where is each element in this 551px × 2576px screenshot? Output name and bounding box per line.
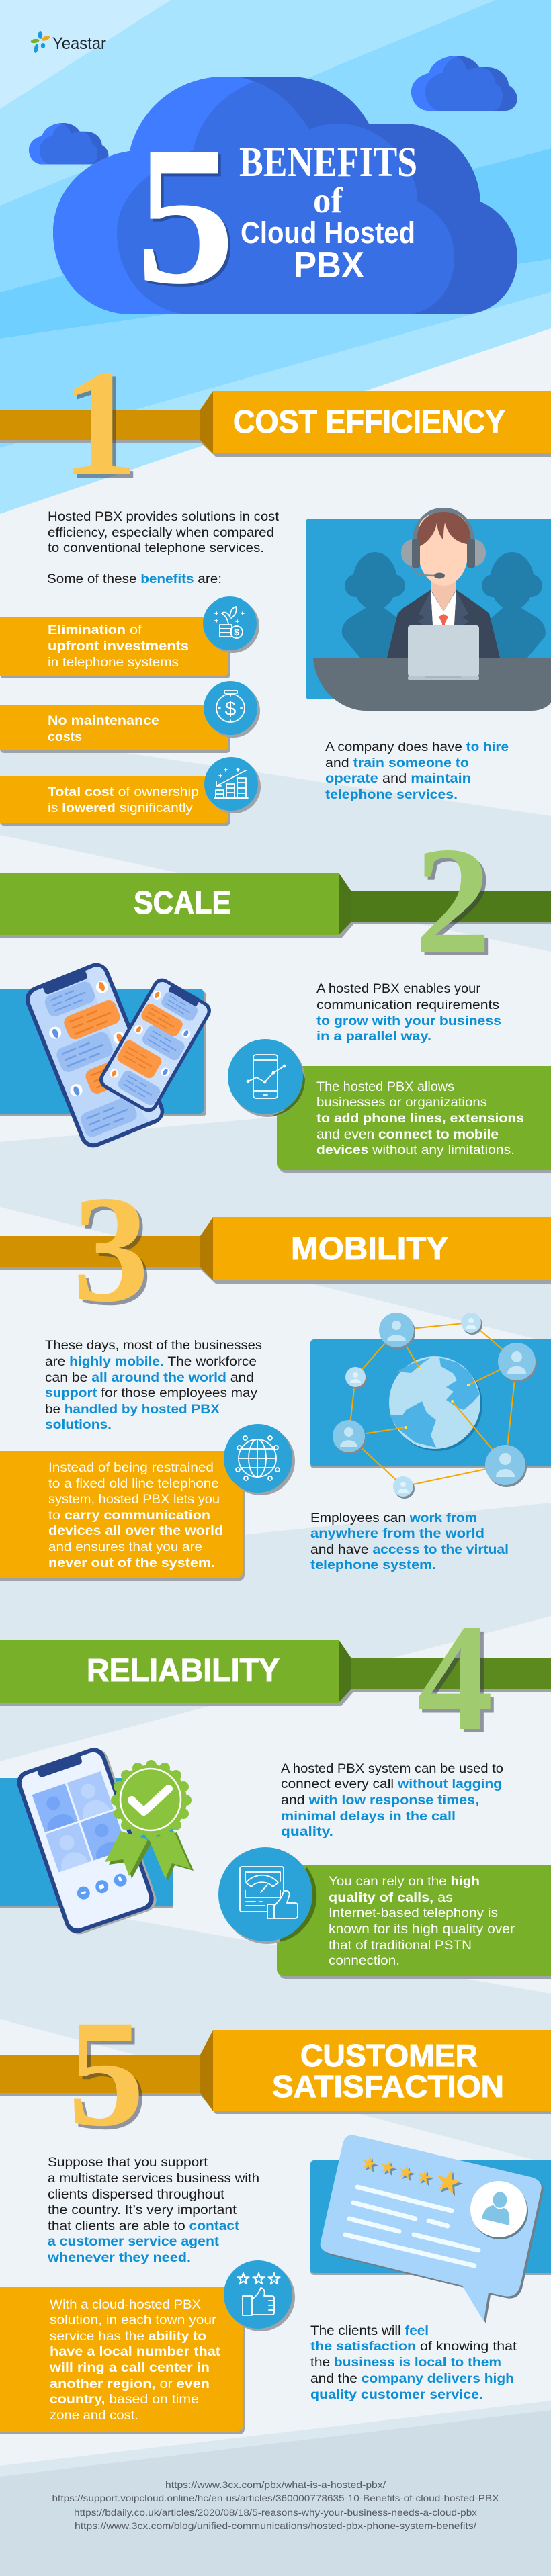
panel: add phone lines: and even connect to mobile bbox=[316, 1128, 499, 1142]
text: mobility intro: can be all around the world and bbox=[45, 1371, 254, 1385]
icon: networked globe bbox=[224, 1424, 295, 1495]
panel: high quality of calls: connection. bbox=[329, 1954, 400, 1968]
icon: stopwatch dollar: $ bbox=[225, 698, 237, 720]
text: scale intro: A hosted PBX enables your bbox=[316, 982, 481, 996]
user nodes bbox=[333, 1313, 537, 1499]
panel: local number: have a local number that bbox=[50, 2345, 221, 2359]
silhouette left bbox=[342, 552, 407, 658]
panel: blue backdrop satisfaction bbox=[310, 2160, 551, 2275]
text: source links bbox=[52, 2479, 499, 2531]
panel: add phone lines: to add phone lines, extensions bbox=[316, 1112, 524, 1126]
ribbon: cost efficiency bbox=[0, 391, 551, 457]
panel: elimination of upfront investments: Elimination of bbox=[48, 623, 142, 637]
title: Cloud Hosted bbox=[241, 216, 415, 250]
text: source links: https://bdaily.co.uk/articles/2020/08/18/5-reasons-why-your-business-needs-a-cloud-pbx bbox=[74, 2507, 477, 2518]
ribbon: mobility: MOBILITY bbox=[291, 1231, 448, 1267]
panel: elimination of upfront investments bbox=[0, 617, 230, 678]
globe bbox=[389, 1356, 482, 1451]
text: reliability intro bbox=[281, 1762, 503, 1839]
panel: total cost of ownership: is lowered significantly bbox=[48, 801, 194, 815]
panel: local number bbox=[0, 2287, 245, 2434]
text: hire and train: A company does have to hire bbox=[325, 740, 509, 754]
panel: carry communication devices: to a fixed old line telephone bbox=[48, 1477, 219, 1491]
panel: total cost of ownership: Total cost of ownership bbox=[48, 785, 199, 799]
text: hire and train: operate and maintain bbox=[325, 772, 471, 786]
text: customer satisfaction intro: that clients are able to contact bbox=[48, 2219, 240, 2233]
title: of bbox=[313, 181, 343, 220]
text: customer satisfaction intro bbox=[47, 2156, 259, 2265]
illustration: call center agent bbox=[306, 508, 551, 711]
text: hire and train bbox=[325, 740, 509, 802]
text: scale intro: communication requirements bbox=[316, 998, 499, 1012]
text: customer satisfaction intro: a customer service agent bbox=[48, 2235, 220, 2249]
text: cost efficiency intro: Hosted PBX provides solutions in cost bbox=[48, 510, 280, 524]
panel: high quality of calls bbox=[277, 1865, 551, 1979]
panel: carry communication devices: system, hosted PBX lets you bbox=[48, 1493, 220, 1507]
text: work from anywhere: telephone system. bbox=[310, 1558, 436, 1572]
panel: carry communication devices: never out of the system. bbox=[48, 1556, 215, 1570]
ribbon: customer satisfaction: SATISFACTION bbox=[272, 2069, 504, 2104]
ribbon: scale bbox=[0, 873, 551, 938]
panel: high quality of calls: quality of calls, as bbox=[329, 1891, 453, 1905]
illustration: global network bbox=[310, 1313, 551, 1499]
panel: no maintenance costs: No maintenance bbox=[48, 714, 159, 728]
desk bbox=[313, 658, 551, 711]
panel: blue backdrop reliability bbox=[0, 1778, 173, 1908]
icon: small cloud left bbox=[29, 123, 109, 164]
text: source links: https://support.voipcloud.online/hc/en-us/articles/360000778635-10-Benefits-of-cloud-hosted-PBX bbox=[52, 2493, 499, 2503]
panel: high quality of calls: that of traditional PSTN bbox=[329, 1939, 472, 1953]
panel: high quality of calls: Internet-based telephony is bbox=[329, 1906, 498, 1920]
icon: stopwatch dollar bbox=[204, 681, 260, 738]
number 5: 5 bbox=[68, 1989, 144, 2158]
icon: phone with growth line bbox=[228, 1039, 305, 1117]
illustration: video call phone bbox=[13, 1744, 159, 1938]
panel: local number: country, based on time bbox=[50, 2393, 199, 2407]
text: customer satisfaction intro: the country. It’s very important bbox=[48, 2203, 237, 2217]
panel: local number: zone and cost. bbox=[50, 2409, 138, 2423]
icon: approval badge bbox=[105, 1760, 194, 1881]
logo: Yeastar bbox=[30, 31, 106, 53]
text: hire and train: telephone services. bbox=[325, 788, 458, 802]
text: feel the satisfaction bbox=[310, 2324, 517, 2402]
number 1: 1 bbox=[61, 339, 138, 508]
review lines bbox=[345, 2187, 478, 2266]
panel: blue backdrop scale bbox=[0, 989, 206, 1116]
ribbon: customer satisfaction: CUSTOMER bbox=[300, 2038, 478, 2073]
panel: carry communication devices: to carry communication bbox=[48, 1509, 210, 1523]
ribbon: reliability bbox=[0, 1640, 551, 1706]
text: feel the satisfaction: The clients will feel bbox=[310, 2324, 429, 2338]
text: source links: https://www.3cx.com/pbx/what-is-a-hosted-pbx/ bbox=[165, 2479, 386, 2490]
reviewer avatar bbox=[470, 2181, 528, 2239]
panel: blue backdrop mobility bbox=[310, 1339, 551, 1468]
panel: no maintenance costs: costs bbox=[48, 730, 82, 744]
panel: carry communication devices: Instead of being restrained bbox=[48, 1461, 214, 1475]
ribbon: scale: SCALE bbox=[134, 885, 231, 921]
speech bubble bbox=[321, 2135, 544, 2323]
text: work from anywhere: anywhere from the world bbox=[310, 1527, 484, 1541]
text: feel the satisfaction: the satisfaction of knowing that bbox=[310, 2340, 517, 2354]
text: reliability intro: connect every call without lagging bbox=[281, 1777, 502, 1791]
text: reliability intro: and with low response times, bbox=[281, 1793, 479, 1808]
text: cost efficiency intro: to conventional telephone services. bbox=[48, 541, 264, 556]
text: reliability intro: quality. bbox=[281, 1825, 333, 1839]
panel: no maintenance costs bbox=[0, 705, 230, 753]
title cloud bbox=[53, 77, 517, 314]
panel: add phone lines bbox=[277, 1066, 551, 1173]
laptop bbox=[408, 625, 479, 680]
panel: blue backdrop bbox=[306, 519, 551, 699]
panel: local number: service has the ability to bbox=[50, 2329, 206, 2344]
illustration: review speech bubble bbox=[310, 2135, 551, 2323]
text: mobility intro: solutions. bbox=[45, 1418, 112, 1432]
text: work from anywhere: and have access to the virtual bbox=[310, 1543, 509, 1557]
background: footer band bbox=[0, 2410, 551, 2576]
rating stars bbox=[361, 2155, 465, 2197]
network links bbox=[349, 1323, 517, 1486]
panel: carry communication devices: devices all over the world bbox=[48, 1524, 223, 1538]
number 3: 3 bbox=[73, 1165, 149, 1334]
illustration: small chat phone bbox=[96, 975, 214, 1116]
text: customer satisfaction intro: whenever they need. bbox=[47, 2251, 191, 2265]
text: reliability intro: minimal delays in the call bbox=[281, 1810, 456, 1824]
title: 5 bbox=[136, 105, 235, 326]
number 2: 2 bbox=[415, 816, 491, 985]
panel: local number: will ring a call center in bbox=[49, 2361, 210, 2375]
icon: stars and thumbs up bbox=[224, 2260, 295, 2331]
agent figure bbox=[387, 508, 500, 658]
text: mobility intro: support for those employees may bbox=[45, 1386, 258, 1401]
text: cost efficiency intro: efficiency, especially when compared bbox=[48, 526, 274, 540]
number 4: 4 bbox=[417, 1593, 493, 1763]
panel: local number: another region, or even bbox=[50, 2377, 210, 2391]
ribbon: mobility bbox=[0, 1217, 551, 1284]
text: source links: https://www.3cx.com/blog/unified-communications/hosted-pbx-phone-system-benefits/ bbox=[75, 2520, 476, 2531]
logo: Yeastar: Yeastar bbox=[52, 34, 106, 53]
ribbon: cost efficiency: COST EFFICIENCY bbox=[233, 404, 505, 440]
text: customer satisfaction intro: Suppose that you support bbox=[48, 2156, 208, 2170]
text: mobility intro bbox=[45, 1339, 262, 1432]
panel: elimination of upfront investments: upfront investments bbox=[48, 639, 189, 654]
panel: add phone lines: businesses or organizations bbox=[316, 1096, 487, 1110]
text: feel the satisfaction: and the company delivers high bbox=[310, 2372, 514, 2386]
title: PBX bbox=[294, 244, 364, 285]
panel: total cost of ownership bbox=[0, 776, 230, 826]
text: work from anywhere bbox=[310, 1511, 509, 1572]
panel: add phone lines: The hosted PBX allows bbox=[316, 1080, 454, 1094]
text: mobility intro: These days, most of the businesses bbox=[45, 1339, 262, 1353]
title bbox=[136, 105, 417, 326]
text: customer satisfaction intro: clients dispersed throughout bbox=[48, 2188, 225, 2202]
panel: elimination of upfront investments: in telephone systems bbox=[48, 656, 179, 670]
text: scale intro bbox=[316, 982, 501, 1044]
icon: small cloud right bbox=[411, 56, 517, 111]
icon: gauge with thumbs up bbox=[218, 1847, 316, 1944]
text: reliability intro: A hosted PBX system can be used to bbox=[281, 1762, 503, 1776]
panel: carry communication devices bbox=[0, 1451, 245, 1581]
text: scale intro: in a parallel way. bbox=[316, 1030, 431, 1044]
panel: local number: solution, in each town your bbox=[50, 2313, 217, 2327]
silhouette right bbox=[482, 552, 546, 658]
background: pale diagonal bands bbox=[0, 734, 551, 2576]
panel: add phone lines: devices without any limitations. bbox=[316, 1143, 515, 1157]
icon: investment plant and coins bbox=[203, 596, 259, 653]
panel: carry communication devices: and ensures that you are bbox=[48, 1540, 202, 1554]
text: customer satisfaction intro: a multistate services business with bbox=[48, 2172, 259, 2186]
text: cost efficiency intro: Some of these benefits are: bbox=[47, 572, 222, 586]
panel: high quality of calls: known for its high quality over bbox=[329, 1922, 515, 1937]
ribbon: reliability: RELIABILITY bbox=[87, 1653, 280, 1689]
text: cost efficiency intro bbox=[47, 510, 280, 586]
text: scale intro: to grow with your business bbox=[316, 1014, 501, 1028]
text: feel the satisfaction: quality customer service. bbox=[310, 2388, 483, 2402]
text: hire and train: and train someone to bbox=[325, 756, 469, 770]
icon: investment plant and coins: $ bbox=[234, 627, 239, 637]
illustration: large chat phone bbox=[22, 959, 168, 1151]
panel: local number: With a cloud-hosted PBX bbox=[50, 2298, 201, 2312]
text: work from anywhere: Employees can work from bbox=[310, 1511, 477, 1525]
ribbon: customer satisfaction bbox=[0, 2030, 551, 2114]
background: sky bands bbox=[0, 0, 551, 514]
text: mobility intro: are highly mobile. The workforce bbox=[45, 1355, 257, 1369]
text: mobility intro: be handled by hosted PBX bbox=[45, 1403, 220, 1417]
icon: coin stacks with falling arrow bbox=[204, 757, 261, 813]
text: feel the satisfaction: the business is local to them bbox=[310, 2356, 501, 2370]
title: BENEFITS bbox=[239, 140, 417, 185]
panel: high quality of calls: You can rely on the high bbox=[329, 1875, 480, 1889]
